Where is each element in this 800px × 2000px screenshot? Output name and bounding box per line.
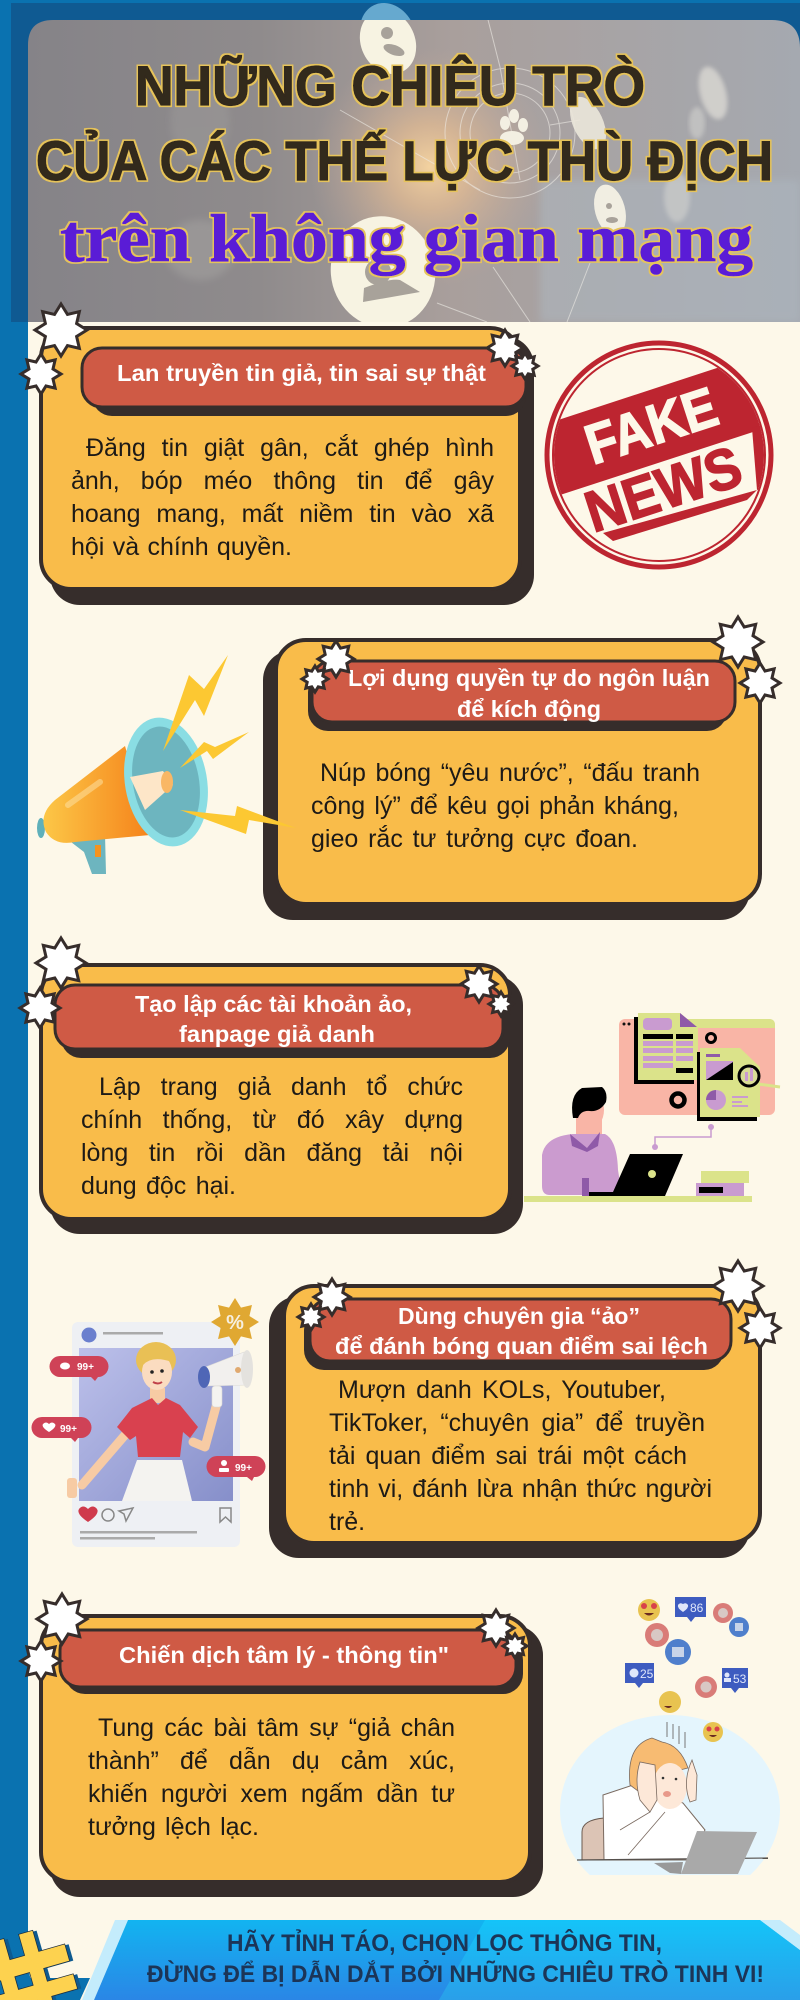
text block: Tung các bài tâm sự “giả chân <box>98 1714 455 1742</box>
stars <box>298 1261 780 1348</box>
heading <box>312 661 735 722</box>
heading <box>310 1299 731 1361</box>
icon: megaphone <box>37 655 296 874</box>
text block: tải quan điểm sai trái một cách <box>329 1442 687 1470</box>
text block: tinh vi, đánh lừa nhận thức người <box>329 1475 712 1503</box>
text block: ảnh, bóp méo thông tin để gây <box>71 467 494 495</box>
text block: khiến người xem ngấm dần tư <box>88 1780 455 1808</box>
text block <box>329 1374 729 1542</box>
stars <box>302 617 780 703</box>
text block <box>81 1071 463 1206</box>
reaction icons: 25 <box>640 1667 654 1681</box>
heading: Chiến dịch tâm lý - thông tin" <box>119 1642 449 1668</box>
heading <box>82 348 526 407</box>
heading: Dùng chuyên gia “ảo” <box>398 1303 640 1329</box>
title: NHỮNG CHIÊU TRÒ <box>135 54 645 117</box>
icon: yellow hashtag <box>0 1922 96 2000</box>
reaction icons: 53 <box>733 1672 747 1686</box>
stars <box>21 1594 527 1681</box>
text block: dung độc hại. <box>81 1172 236 1200</box>
heading: để kích động <box>457 696 601 722</box>
header banner <box>11 0 800 340</box>
text block: hội và chính quyền. <box>71 533 292 561</box>
text block: hoang mang, mất niềm tin vào xã <box>71 500 494 528</box>
stars <box>20 938 513 1028</box>
header background image <box>28 20 800 322</box>
icon: fake news stamp: FAKE <box>577 375 725 476</box>
heading: Lợi dụng quyền tự do ngôn luận <box>348 665 710 691</box>
title: trên không gian mạng <box>60 200 753 276</box>
call to action text: ĐỪNG ĐỂ BỊ DẪN DẮT BỞI NHỮNG CHIÊU TRÒ TINH VI! <box>147 1959 764 1988</box>
icon: influencer social post: 99+ <box>235 1463 252 1474</box>
text block <box>88 1712 455 1847</box>
heading: để đánh bóng quan điểm sai lệch <box>335 1333 708 1359</box>
heading <box>55 985 503 1049</box>
icon: stressed woman and reactions <box>560 1597 780 1905</box>
icon: influencer social post: 99+ <box>77 1362 94 1373</box>
reaction icons: 86 <box>690 1601 704 1615</box>
call to action banner <box>82 1920 800 2000</box>
icon: influencer social post <box>32 1298 266 1547</box>
panel: fake experts card <box>269 1261 780 1558</box>
panel: fake accounts card <box>20 938 523 1234</box>
text block: tưởng lệch lạc. <box>88 1813 259 1841</box>
text block: Đăng tin giật gân, cắt ghép hình <box>86 434 494 462</box>
text block <box>311 757 711 859</box>
text block: thành” để dẫn dụ cảm xúc, <box>88 1747 455 1775</box>
heading <box>60 1630 516 1687</box>
panel: psychological campaign card <box>21 1594 543 1897</box>
text block: chính thống, từ đó xây dựng <box>81 1106 463 1134</box>
text block: gieo rắc tư tưởng cực đoan. <box>311 825 638 853</box>
call to action text: HÃY TỈNH TÁO, CHỌN LỌC THÔNG TIN, <box>227 1928 662 1957</box>
text block: Lập trang giả danh tổ chức <box>99 1073 463 1101</box>
stars <box>21 304 538 394</box>
reaction icons <box>625 1597 749 1742</box>
icon: influencer social post: 99+ <box>60 1424 77 1435</box>
panel: free speech card <box>263 617 780 920</box>
icon: person at laptop with documents <box>524 1013 780 1202</box>
call to action text <box>147 1928 764 1988</box>
text block: lòng tin rồi dần đăng tải nội <box>81 1139 463 1167</box>
icon: influencer social post: % <box>226 1312 244 1334</box>
panel: fake news card <box>21 304 538 605</box>
text block: TikToker, “chuyên gia” để truyền <box>329 1409 705 1437</box>
text block: Mượn danh KOLs, Youtuber, <box>338 1376 666 1404</box>
title <box>36 54 773 276</box>
text block: trẻ. <box>329 1508 365 1536</box>
text block: công lý” để kêu gọi phản kháng, <box>311 792 679 820</box>
text block <box>71 432 494 567</box>
heading: Lan truyền tin giả, tin sai sự thật <box>117 360 486 386</box>
text block: Núp bóng “yêu nước”, “đấu tranh <box>320 759 700 787</box>
icon: fake news stamp: NEWS <box>577 434 750 545</box>
heading: fanpage giả danh <box>179 1021 375 1047</box>
heading: Tạo lập các tài khoản ảo, <box>135 991 412 1017</box>
icon: fake news stamp <box>540 343 790 567</box>
